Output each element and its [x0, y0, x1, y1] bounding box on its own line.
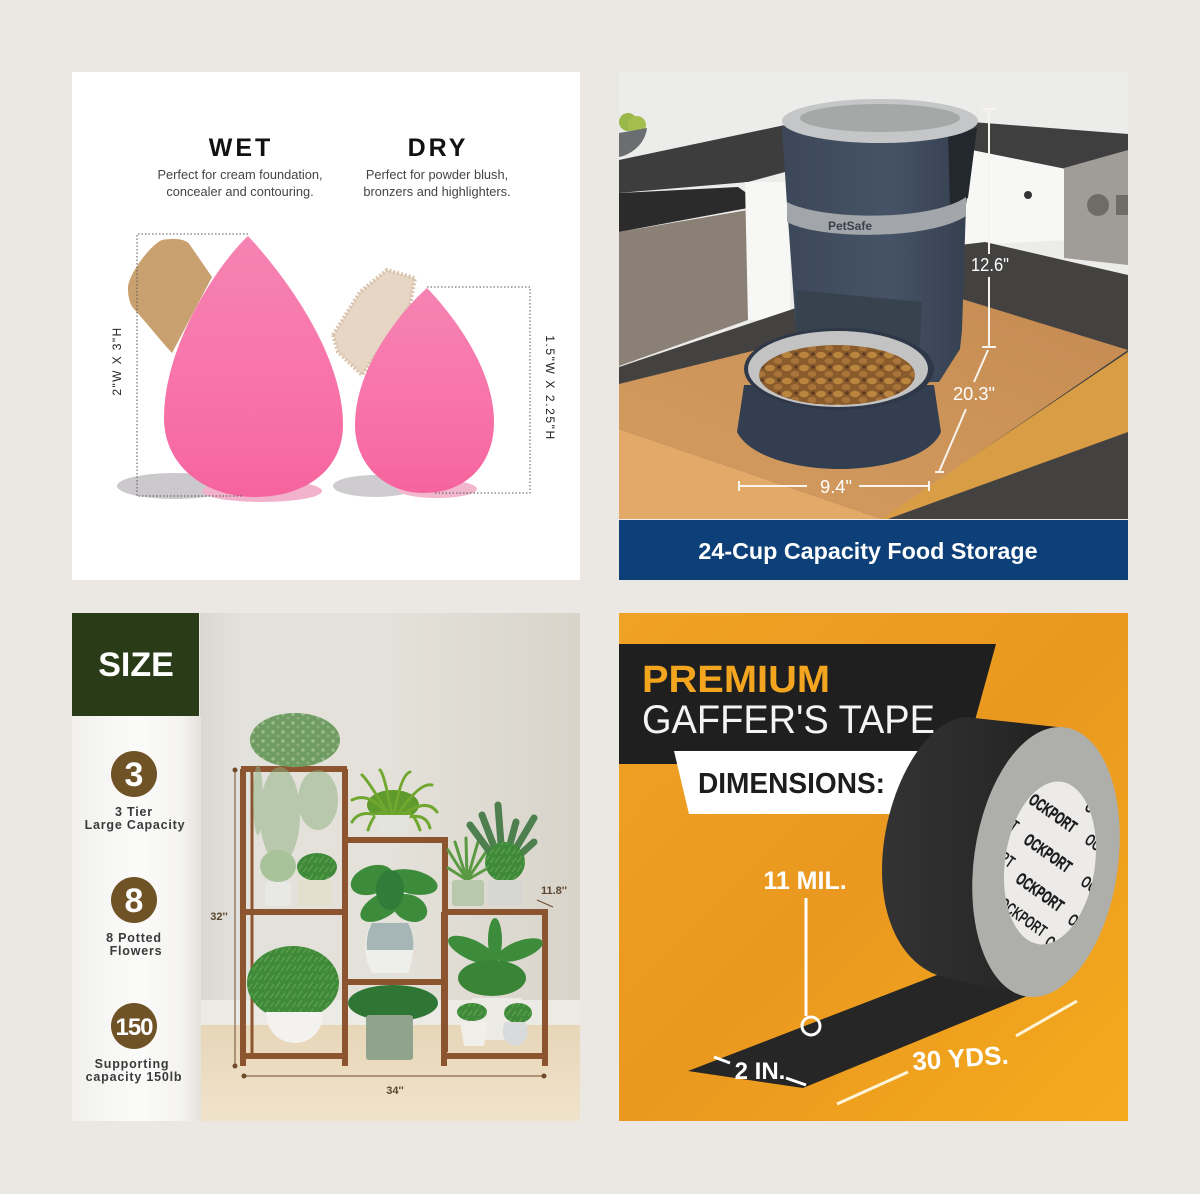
tape roll — [882, 717, 1137, 1007]
dotted dimension lines — [137, 234, 530, 496]
sponge shadows — [117, 473, 477, 502]
label: thickness: 11 MIL. — [763, 867, 847, 895]
badge: 3 tier: Large Capacity — [85, 818, 185, 832]
label: height: 32'' — [210, 911, 228, 923]
kitchen background — [619, 72, 1128, 520]
bowl rim — [748, 331, 928, 407]
panel: plant stand — [72, 613, 580, 1121]
dark island — [619, 242, 1128, 519]
cutting board top — [619, 299, 1128, 519]
brand marks on core: OCKPORT — [1077, 872, 1133, 919]
label: depth: 11.8'' — [541, 885, 567, 897]
badge: 150: 150 — [115, 1014, 153, 1041]
brand marks on core: OCKPORT — [995, 894, 1051, 941]
range top — [619, 187, 748, 232]
label: width: 9.4" — [820, 477, 852, 497]
plants — [247, 713, 546, 1060]
left countertop — [619, 125, 785, 193]
brand marks on core: OCKPORT — [967, 789, 1023, 836]
heading: wet: WET — [209, 134, 273, 162]
text: wet description: Perfect for cream foundation, — [157, 167, 323, 182]
feeder base — [737, 385, 941, 469]
brand marks on core: OCKPORT — [1025, 790, 1081, 837]
pet food — [759, 345, 915, 405]
food chute — [796, 290, 922, 345]
dimension lines — [739, 109, 996, 491]
shelf dimension lines — [233, 768, 553, 1078]
badge: 8 potted: Flowers — [110, 944, 162, 958]
text: dry description: bronzers and highlighters. — [363, 184, 511, 199]
product heading: GAFFER'S TAPE — [642, 698, 935, 742]
label: tape length: 30 YDS. — [911, 1040, 1009, 1076]
cutting board right side — [880, 352, 1128, 519]
brand marks on core — [1004, 794, 1096, 944]
size heading: SIZE — [98, 646, 174, 684]
badge: 3 tier: 3 Tier — [115, 805, 153, 819]
caption text: 24-Cup Capacity Food Storage — [698, 538, 1038, 564]
glossy display panel — [948, 128, 977, 205]
badge: 8 potted: 8 Potted — [106, 931, 162, 945]
cream foundation swatch — [128, 239, 212, 353]
powder swatch — [333, 270, 415, 375]
right countertop — [972, 122, 1128, 169]
panel: pet feeder — [619, 72, 1128, 580]
room floor — [200, 1025, 580, 1121]
small pink sponge — [355, 288, 494, 493]
caption bar — [619, 520, 1128, 580]
panel: gaffer's tape — [619, 613, 1137, 1121]
white cabinets — [745, 150, 1070, 320]
dimensions heading: DIMENSIONS: — [698, 768, 885, 800]
panel: beauty sponges — [72, 72, 580, 580]
white dimensions banner — [674, 751, 922, 814]
badge: 150 — [86, 1003, 182, 1084]
length lines — [837, 1001, 1077, 1104]
cutting board front side — [619, 429, 882, 519]
feeder body — [782, 126, 977, 382]
baseboard — [200, 1000, 580, 1025]
brand marks on core: OCKPORT — [1012, 869, 1068, 916]
label: height: 12.6" — [971, 255, 1009, 275]
tape strip — [688, 973, 1027, 1088]
label: width: 34'' — [386, 1085, 404, 1097]
text: dry description: Perfect for powder blush, — [366, 167, 508, 182]
feeder silver band — [787, 197, 966, 235]
badge: 150: Supporting — [95, 1057, 169, 1071]
width ticks — [714, 1057, 806, 1085]
premium heading: PREMIUM — [642, 659, 830, 701]
label: small sponge size: 1.5"W X 2.25"H — [543, 335, 557, 441]
fruit bowl — [619, 113, 647, 157]
label: large sponge size: 2"W X 3"H — [110, 326, 124, 396]
badge: 8 potted: 8 — [125, 882, 143, 920]
steel bowl — [744, 328, 934, 410]
orange background — [619, 613, 1128, 1121]
badge: 150: capacity 150lb — [86, 1070, 182, 1084]
brand marks on core: OCKPORT — [1041, 932, 1097, 979]
feeder lid — [782, 99, 978, 143]
brand label: PetSafe — [828, 219, 872, 233]
stove knobs — [1087, 194, 1128, 216]
stainless dishwasher — [619, 210, 748, 366]
badge: 3 tier: 3 — [125, 756, 143, 794]
stove — [1064, 150, 1128, 265]
badge: 8 potted — [106, 877, 162, 958]
label: depth: 20.3" — [953, 384, 995, 404]
brand marks on core: OCKPORT — [963, 825, 1019, 872]
marker line for thickness — [802, 898, 820, 1035]
side column — [72, 716, 201, 1121]
label: tape width: 2 IN. — [735, 1058, 785, 1085]
size header block — [72, 613, 199, 716]
badge: 3 tier — [85, 751, 185, 832]
black title banner — [619, 644, 996, 764]
drawer knob — [1024, 191, 1032, 199]
brand marks on core: OCKPORT — [1020, 830, 1076, 877]
room wall — [200, 613, 580, 1025]
heading: dry: DRY — [408, 134, 468, 162]
large pink sponge — [164, 236, 343, 497]
brand marks on core: OCKPORT — [1081, 797, 1137, 844]
wooden shelf — [241, 769, 545, 1066]
brand marks on core: OCKPORT — [1064, 910, 1120, 957]
brand marks on core: OCKPORT — [1081, 830, 1137, 877]
text: wet description: concealer and contouring. — [166, 184, 314, 199]
